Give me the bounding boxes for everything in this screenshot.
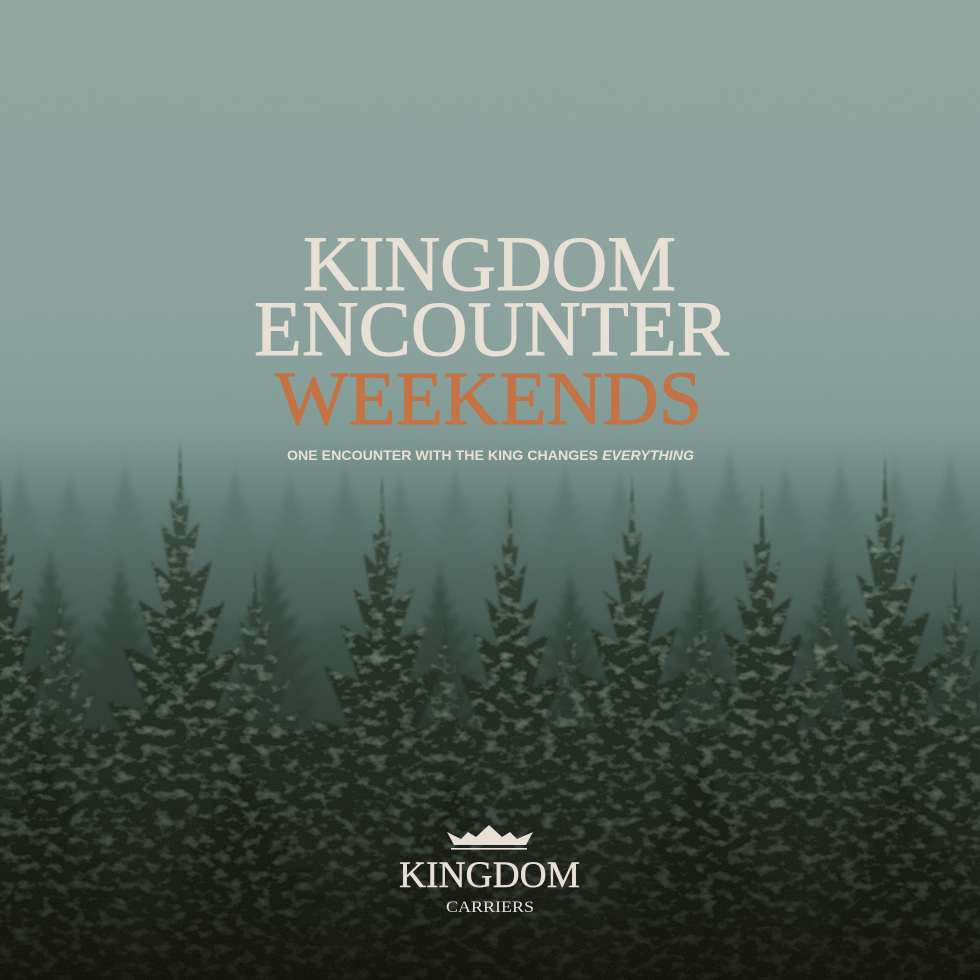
logo wordmark: KINGDOM <box>399 855 580 896</box>
forest floor haze behind the trees <box>0 480 980 720</box>
foreground lower branches <box>0 720 980 980</box>
fir trees behind the main row <box>0 560 980 960</box>
mid-distance tree line <box>0 540 884 760</box>
logo subtitle: CARRIERS <box>446 899 534 916</box>
logo: Kingdom Carriers <box>399 825 580 916</box>
foreground fir trees <box>0 438 980 980</box>
distant hazy forest <box>0 440 980 626</box>
icon: crown <box>447 825 533 850</box>
title line: KINGDOM: KINGDOM <box>303 220 676 307</box>
title line: ENCOUNTER: ENCOUNTER <box>254 285 729 372</box>
darkening toward the bottom <box>0 520 980 980</box>
title <box>254 220 729 441</box>
tagline: ONE ENCOUNTER WITH THE KING CHANGES EVERYTHING <box>287 447 694 463</box>
fog band over the tree tops <box>0 420 980 650</box>
title line: WEEKENDS: WEEKENDS <box>275 357 702 441</box>
